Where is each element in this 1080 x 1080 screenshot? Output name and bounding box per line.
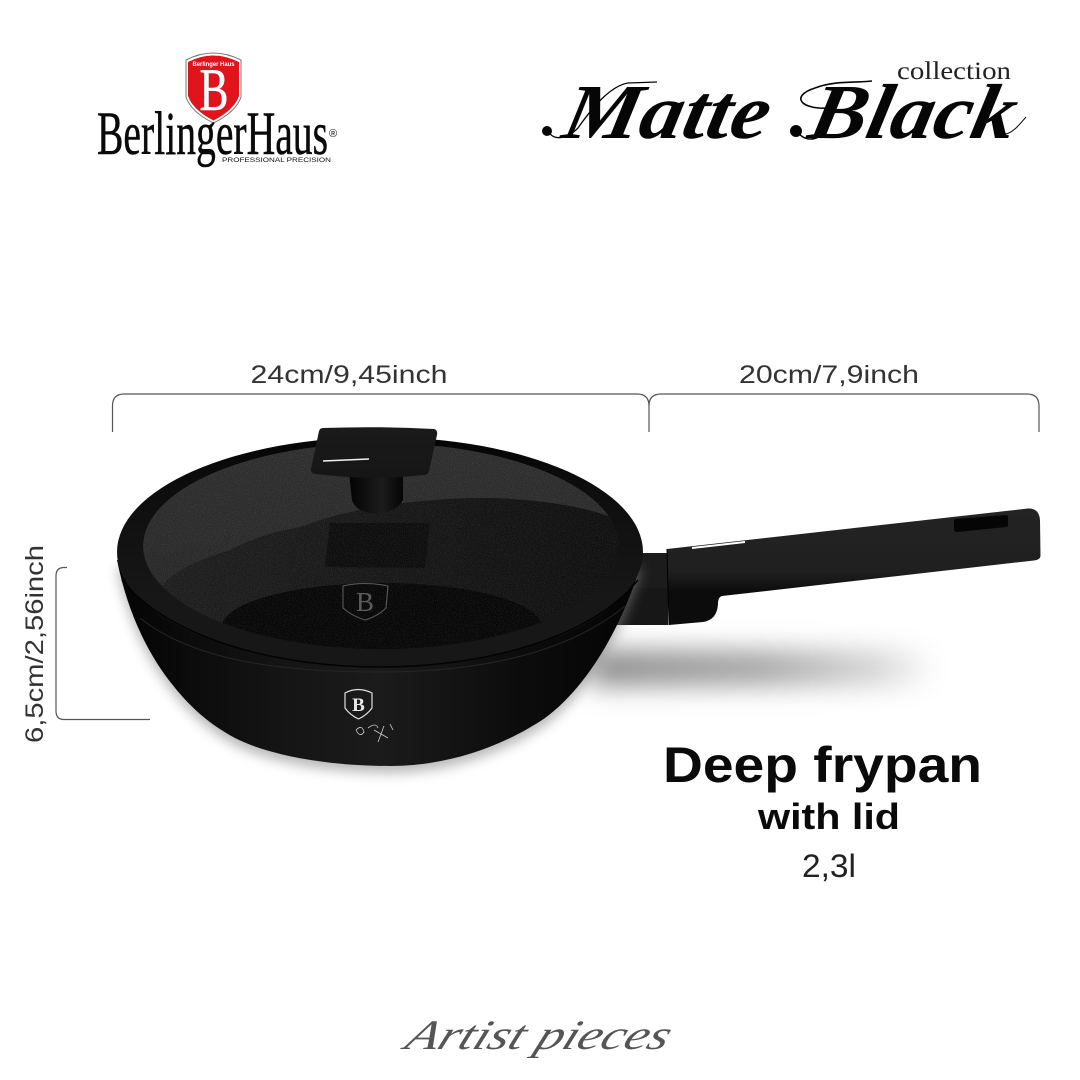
inner logo on glass	[343, 584, 388, 620]
handle	[610, 508, 1040, 625]
inner logo on glass: B	[356, 587, 374, 617]
bracket	[112, 394, 649, 432]
subheading: with lid: with lid	[757, 796, 900, 837]
label: 24cm/9,45inch	[250, 361, 448, 389]
lid knob top	[311, 427, 437, 478]
pan wall reflection	[162, 498, 619, 622]
pan inner floor	[222, 583, 541, 649]
glass lid	[143, 446, 619, 649]
dimension: handle 20cm	[649, 361, 1039, 432]
tagline: PROFESSIONAL PRECISION	[222, 157, 331, 164]
word: Matte Black: Black	[801, 70, 1026, 156]
dimension: width 24cm	[112, 361, 649, 432]
knob highlight	[323, 459, 369, 461]
floor shadow	[590, 650, 935, 686]
lid knob stem	[349, 472, 403, 513]
label: 6,5cm/2,56inch	[21, 545, 49, 743]
collection title	[542, 58, 1026, 156]
dimension: height 6,5cm	[21, 545, 150, 743]
brand logo: Berlinger Haus	[97, 53, 337, 168]
word: Matte Black: Matte	[554, 70, 780, 156]
tagline: Artist pieces: Artist pieces	[395, 1012, 680, 1059]
word: collection: collection	[897, 58, 1012, 85]
rim lower edge	[122, 580, 638, 667]
registered mark: ®	[329, 128, 337, 140]
body contact shadow	[117, 567, 642, 773]
heading: Deep frypan: Deep frypan	[663, 737, 982, 793]
icon: red shield: Berlinger Haus	[192, 61, 235, 68]
body logo: B	[352, 695, 365, 716]
word: Matte Black	[542, 70, 1026, 156]
icon: red shield	[186, 53, 241, 123]
bracket	[56, 568, 150, 720]
speckle texture	[143, 443, 619, 649]
frypan with lid	[117, 427, 1040, 773]
label: 20cm/7,9inch	[739, 361, 919, 389]
body logo	[345, 690, 372, 719]
body signature	[356, 724, 393, 742]
wordmark: BerlingerHaus	[97, 101, 328, 168]
capacity: 2,3l	[802, 848, 856, 884]
icon: red shield: B	[200, 57, 228, 123]
body groove lines	[140, 606, 625, 672]
bracket	[649, 394, 1039, 432]
product name	[663, 737, 982, 884]
pan body	[117, 560, 642, 766]
knob reflection	[325, 523, 430, 568]
glass base	[143, 446, 608, 586]
lid rim	[117, 437, 643, 667]
